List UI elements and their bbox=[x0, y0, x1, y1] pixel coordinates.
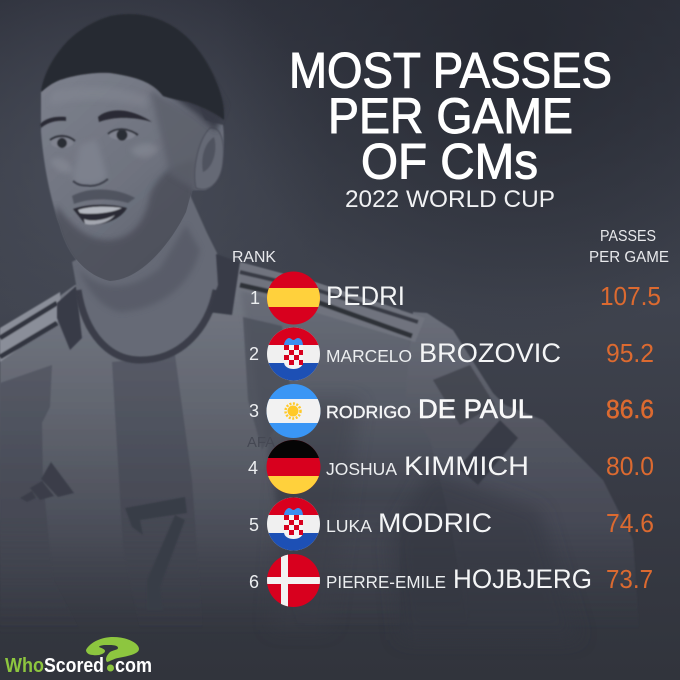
question mark icon bbox=[86, 637, 139, 662]
collar bbox=[78, 290, 216, 360]
player name: PIERRE-EMILE bbox=[326, 572, 446, 592]
player name: BROZOVIC bbox=[419, 338, 561, 368]
flag: Argentina bbox=[266, 384, 320, 438]
player name: KIMMICH bbox=[404, 451, 529, 481]
title: OF CMs bbox=[361, 134, 538, 190]
player name: JOSHUA bbox=[326, 459, 397, 479]
row 2: Marcelo Brozovic bbox=[249, 326, 654, 382]
title: MOST PASSES bbox=[289, 42, 612, 98]
left shoulder stripes bbox=[0, 292, 62, 362]
flag: Spain bbox=[267, 272, 320, 324]
player name bbox=[326, 338, 561, 368]
value: 107.5 bbox=[600, 281, 661, 311]
player name: MODRIC bbox=[378, 508, 492, 538]
row 3: Rodrigo De Paul bbox=[249, 383, 654, 440]
passes per game column heading bbox=[589, 228, 669, 266]
player name: HOJBJERG bbox=[453, 564, 592, 594]
rank column heading: RANK bbox=[232, 249, 276, 266]
rank 4: 4 bbox=[248, 458, 258, 478]
row 5: Luka Modric bbox=[249, 496, 654, 552]
wordmark: com bbox=[115, 655, 152, 677]
value: 95.2 bbox=[606, 338, 654, 368]
jersey body bbox=[0, 258, 640, 640]
player name: DE PAUL bbox=[418, 394, 533, 424]
rank 6: 6 bbox=[249, 572, 259, 592]
flag: Denmark bbox=[267, 554, 320, 607]
rank 1: 1 bbox=[250, 288, 260, 308]
eyes bbox=[50, 129, 138, 148]
right shoulder stripes bbox=[240, 262, 425, 342]
passes per game column heading: PASSES bbox=[600, 228, 656, 245]
passes per game column heading: PER GAME bbox=[589, 249, 669, 266]
question mark dot bbox=[107, 664, 114, 672]
adidas logo bbox=[20, 462, 74, 502]
flag: Germany bbox=[266, 440, 320, 494]
rank 3: 3 bbox=[249, 401, 259, 421]
row 6: Pierre-Emile Hojbjerg bbox=[249, 553, 653, 609]
flag: Croatia bbox=[267, 328, 320, 380]
wordmark bbox=[5, 655, 152, 677]
wordmark: Who bbox=[5, 655, 44, 677]
player name bbox=[326, 564, 592, 594]
neck bbox=[72, 195, 220, 356]
wordmark: Scored bbox=[44, 655, 104, 677]
value: 73.7 bbox=[606, 564, 653, 594]
rank 2: 2 bbox=[249, 344, 259, 364]
ear bbox=[195, 128, 223, 189]
value: 86.6 bbox=[606, 394, 654, 424]
hair bbox=[41, 14, 226, 131]
number seven bbox=[125, 497, 187, 610]
row 1: Pedri bbox=[250, 270, 661, 326]
player name: LUKA bbox=[326, 516, 372, 536]
player name bbox=[326, 508, 492, 538]
value: 74.6 bbox=[606, 508, 654, 538]
title bbox=[289, 42, 612, 190]
player name bbox=[326, 394, 533, 424]
beard and cheek shading bbox=[54, 92, 210, 281]
player name bbox=[326, 451, 529, 481]
mouth bbox=[73, 205, 127, 225]
face bbox=[40, 72, 224, 281]
player name: RODRIGO bbox=[326, 402, 411, 422]
player name: MARCELO bbox=[326, 346, 412, 366]
player name: PEDRI bbox=[326, 281, 405, 311]
WhoScored logo bbox=[5, 637, 152, 677]
eyebrows bbox=[40, 110, 152, 128]
value: 80.0 bbox=[606, 451, 654, 481]
title: PER GAME bbox=[328, 88, 573, 144]
crest letters: AFA bbox=[247, 434, 275, 451]
nose bbox=[73, 140, 108, 186]
subtitle: 2022 WORLD CUP bbox=[345, 186, 555, 213]
rank 5: 5 bbox=[249, 515, 259, 535]
row 4: Joshua Kimmich bbox=[248, 439, 654, 496]
flag: Croatia bbox=[267, 498, 320, 550]
